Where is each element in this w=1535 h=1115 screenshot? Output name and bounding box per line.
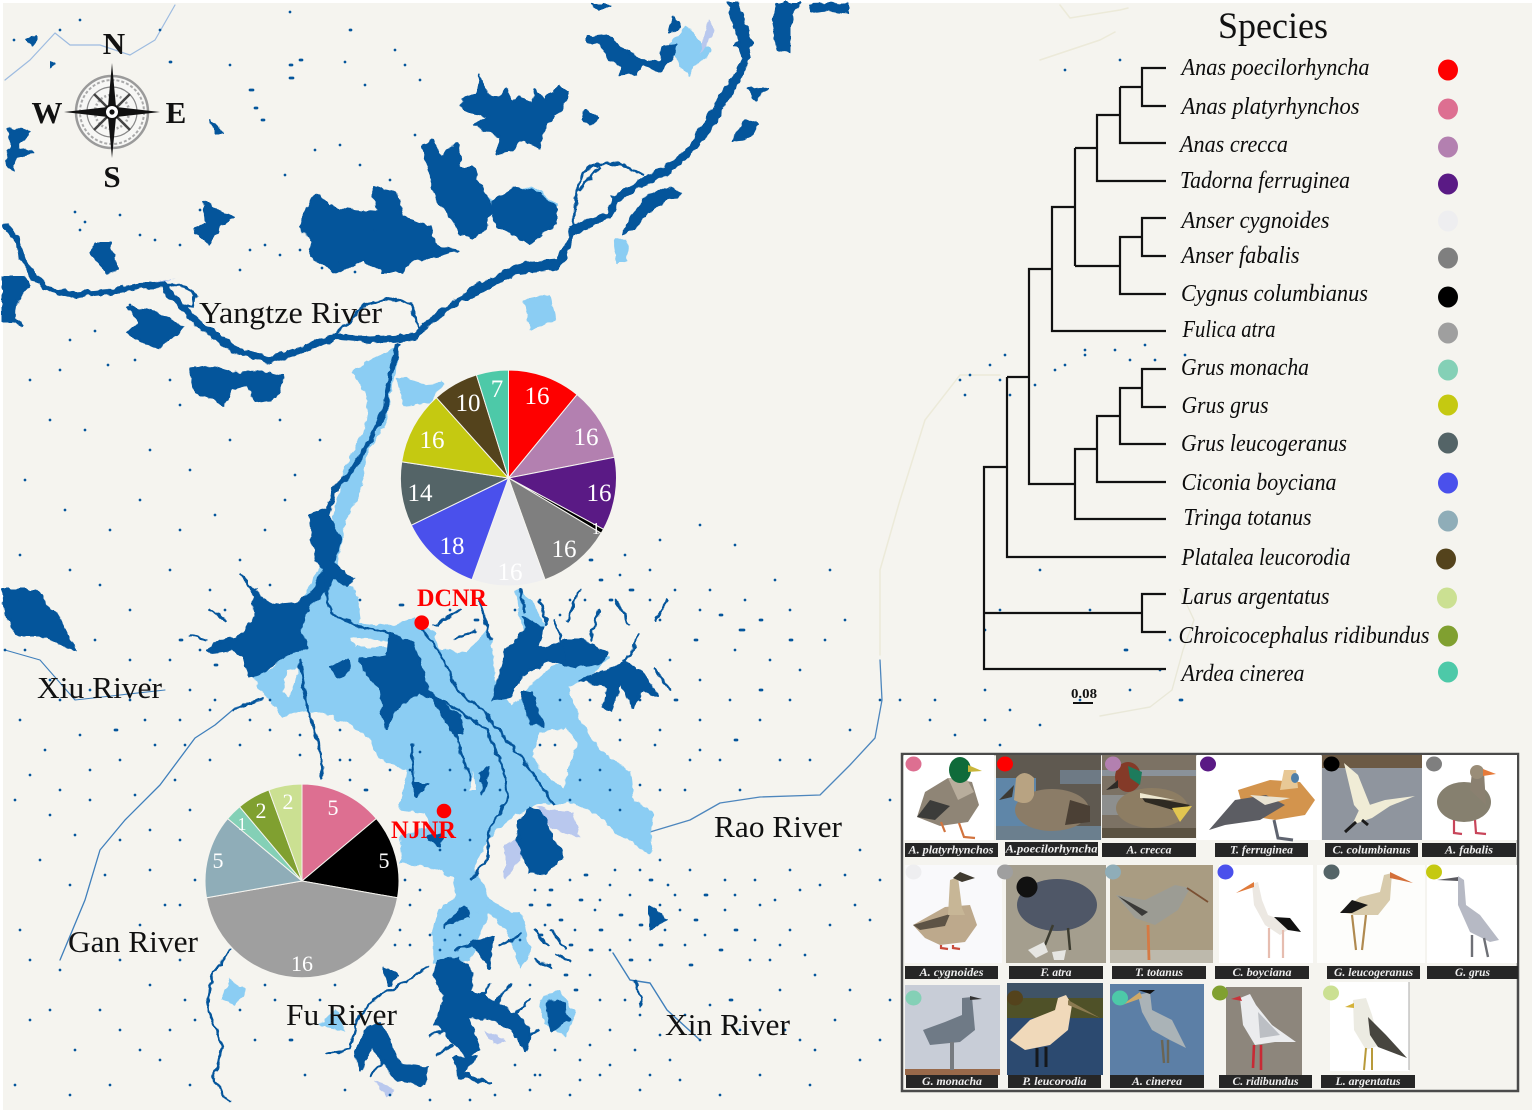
DCNR slice values: 16 — [498, 559, 522, 586]
species names: Anas poecilorhyncha — [1180, 55, 1370, 81]
species names: Anas platyrhynchos — [1180, 94, 1360, 120]
species names: Cygnus columbianus — [1181, 281, 1368, 307]
site label: DCNR — [414, 585, 488, 630]
species names: Ciconia boyciana — [1182, 470, 1336, 496]
bird: C. boyciana: C. boyciana — [1232, 967, 1292, 979]
bird: P. leucorodia — [1007, 983, 1103, 1088]
bird: A. cinerea — [1110, 984, 1204, 1088]
bird: A. platyrhynchos: A. platyrhynchos — [907, 844, 994, 856]
species names: Anser cygnoides — [1180, 208, 1330, 234]
pie chart: DCNR species counts — [400, 370, 617, 586]
species names: Grus grus — [1182, 393, 1268, 419]
Yangtze River main channel — [455, 3, 752, 300]
NJNR slice values — [212, 789, 390, 976]
bird: L. argentatus: L. argentatus — [1334, 1076, 1401, 1088]
compass letters: E — [166, 95, 186, 130]
DCNR slice values: 18 — [440, 533, 464, 560]
NJNR slice values: 5 — [212, 848, 224, 873]
species names: Tadorna ferruginea — [1180, 168, 1350, 194]
compass rose — [32, 26, 186, 194]
DCNR slice values — [408, 376, 612, 586]
bird: P. leucorodia: P. leucorodia — [1022, 1076, 1087, 1088]
bird: A. poecilorhyncha — [996, 755, 1101, 856]
river labels — [37, 295, 843, 1042]
species names: Ardea cinerea — [1180, 661, 1304, 687]
DCNR slice values: 16 — [552, 536, 576, 563]
heading: Species: Species — [1218, 6, 1328, 47]
species names: Fulica atra — [1182, 317, 1276, 343]
NJNR slice values: 5 — [328, 795, 338, 820]
site label: NJNR — [391, 804, 457, 844]
light water: flood extent of Poyang Lake — [253, 580, 652, 967]
panel: bird photographs — [902, 754, 1518, 1091]
species names: Larus argentatus — [1181, 584, 1330, 610]
bird: A. crecca: A. crecca — [1125, 844, 1172, 856]
bird: G. monacha — [905, 985, 1000, 1088]
bird: C. columbianus: C. columbianus — [1332, 844, 1411, 856]
river labels: Yangtze River — [199, 295, 383, 330]
land islands and lavender patches — [283, 613, 577, 790]
dark water: lakes west of the Yangtze — [127, 307, 183, 347]
scale bar 0.08: 0.08 — [1071, 687, 1097, 702]
compass letters: S — [103, 159, 121, 194]
dark water: lakes north of the Yangtze — [300, 187, 457, 273]
bird: A. cinerea: A. cinerea — [1131, 1076, 1182, 1088]
DCNR slice values: 7 — [491, 376, 503, 403]
DCNR slice values: 16 — [420, 427, 444, 454]
compass letters: W — [32, 95, 62, 130]
species names — [1178, 55, 1430, 687]
bird: G. grus — [1426, 864, 1518, 979]
bird: T. totanus: T. totanus — [1135, 967, 1184, 979]
bird: A. poecilorhyncha: A.poecilorhyncha — [1004, 844, 1098, 856]
river labels: Gan River — [68, 924, 199, 959]
bird: T. ferruginea — [1197, 755, 1321, 857]
bird: C. columbianus — [1322, 755, 1422, 857]
river labels: Xiu River — [37, 670, 163, 705]
NJNR slice values: 5 — [378, 848, 390, 873]
bird: G. leucogeranus: G. leucogeranus — [1334, 967, 1414, 979]
bird: A. crecca — [1102, 755, 1196, 857]
river labels: Fu River — [286, 997, 398, 1032]
water bodies — [3, 3, 847, 1103]
bird: T. ferruginea: T. ferruginea — [1230, 844, 1293, 856]
DCNR slice values: 16 — [524, 383, 550, 410]
river labels: Xin River — [665, 1007, 791, 1042]
species names: Tringa totanus — [1184, 505, 1312, 531]
bird: A. fabalis — [1422, 755, 1517, 857]
NJNR slice values: 16 — [291, 951, 313, 976]
pie chart: NJNR species counts — [205, 784, 399, 978]
bird: A. cygnoides — [905, 864, 1002, 979]
DCNR slice values: 1 — [592, 519, 600, 538]
species names: Anas crecca — [1178, 132, 1288, 158]
DCNR slice values: 14 — [408, 480, 433, 507]
compass letters: N — [103, 26, 125, 61]
NJNR slice values: 2 — [256, 798, 266, 823]
compass letters — [32, 26, 186, 194]
DCNR slice values: 16 — [574, 424, 598, 451]
species names: Grus monacha — [1181, 355, 1309, 381]
bird: F. atra — [997, 864, 1106, 979]
species names: Anser fabalis — [1180, 243, 1300, 269]
NJNR slice values: 1 — [238, 814, 246, 834]
bird: G. leucogeranus — [1317, 864, 1425, 979]
bird: C. ridibundus: C. ridibundus — [1232, 1076, 1299, 1088]
species names: Chroicocephalus ridibundus — [1178, 623, 1430, 649]
bird: A. fabalis: A. fabalis — [1444, 844, 1494, 856]
river labels: Rao River — [714, 809, 843, 844]
species names: Platalea leucorodia — [1181, 545, 1350, 571]
dark water: Poyang lake basin — [207, 560, 353, 677]
site label: DCNR: DCNR — [417, 585, 488, 612]
NJNR slice values: 2 — [282, 789, 294, 814]
bird: A. cygnoides: A. cygnoides — [918, 967, 984, 979]
bird: C. boyciana — [1215, 864, 1313, 979]
bird: C. ridibundus — [1212, 986, 1312, 1088]
bird: A. platyrhynchos — [904, 755, 998, 857]
faint tributaries — [5, 5, 1194, 1040]
species colour legend dots — [1436, 60, 1458, 682]
bird: G. monacha: G. monacha — [922, 1076, 982, 1088]
scattered ponds — [5, 12, 1185, 1100]
bird: L. argentatus — [1321, 982, 1415, 1088]
DCNR slice values: 16 — [586, 480, 612, 507]
DCNR slice values: 10 — [456, 390, 480, 417]
bird: G. grus: G. grus — [1455, 967, 1491, 979]
species names: Grus leucogeranus — [1181, 431, 1347, 457]
bird: T. totanus — [1105, 864, 1213, 979]
phylogenetic tree — [984, 68, 1166, 703]
site label: NJNR: NJNR — [391, 817, 457, 844]
bird: F. atra: F. atra — [1040, 967, 1072, 979]
map: Poyang Lake basin and Yangtze River — [3, 3, 1194, 1103]
